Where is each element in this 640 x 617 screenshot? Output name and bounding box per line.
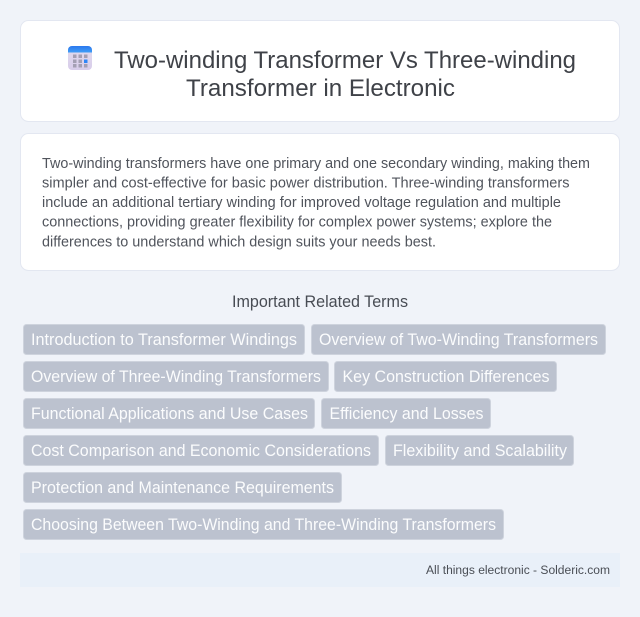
- chip: protection: Protection and Maintenance Requirements: [31, 479, 334, 497]
- text block: description: include an additional tertiary winding for improved voltage regulation and multiple: [42, 195, 561, 211]
- chip: two-winding overview: [312, 324, 606, 354]
- chip: introduction: [24, 324, 304, 354]
- chip: choosing: [24, 510, 504, 540]
- chip: construction: [334, 362, 556, 392]
- chip: cost: Cost Comparison and Economic Considerations: [31, 442, 371, 460]
- panel: description: [20, 134, 620, 270]
- chip: applications: [24, 398, 314, 428]
- panel: header: [20, 20, 620, 122]
- chip: flexibility: [386, 436, 574, 466]
- footer: [20, 553, 620, 587]
- chip: two-winding overview: Overview of Two-Winding Transformers: [319, 331, 598, 349]
- title: [114, 47, 576, 102]
- heading: important related terms: Important Related Terms: [232, 293, 408, 311]
- chip: protection: [24, 472, 342, 502]
- chip: cost: [24, 436, 378, 466]
- chip: flexibility: Flexibility and Scalability: [393, 442, 568, 460]
- chip: introduction: Introduction to Transformer Windings: [31, 331, 297, 349]
- text block: description: Two-winding transformers have one primary and one secondary winding, making them: [42, 156, 590, 172]
- chip: construction: Key Construction Differences: [342, 368, 550, 386]
- chip: three-winding overview: Overview of Three-Winding Transformers: [31, 368, 321, 386]
- footer: All things electronic - Solderic.com: [426, 563, 610, 577]
- text block: description: differences to understand which design suits your needs best.: [42, 234, 436, 250]
- chip: efficiency: [322, 398, 490, 428]
- chip: choosing: Choosing Between Two-Winding and Three-Winding Transformers: [31, 516, 496, 534]
- title: Two-winding Transformer Vs Three-winding: [114, 47, 576, 74]
- icon: calendar grid: [68, 46, 92, 70]
- text block: description: connections, providing greater flexibility for complex power systems; explore the: [42, 214, 552, 230]
- panel: related terms chips: [24, 324, 606, 540]
- title: Transformer in Electronic: [186, 75, 455, 102]
- chip: efficiency: Efficiency and Losses: [330, 405, 484, 423]
- chip: applications: Functional Applications and Use Cases: [31, 405, 308, 423]
- text block: description: simpler and cost-effective for basic power distribution. Three-winding transformers: [42, 176, 570, 192]
- text block: description: [42, 156, 590, 250]
- chip: three-winding overview: [24, 362, 328, 392]
